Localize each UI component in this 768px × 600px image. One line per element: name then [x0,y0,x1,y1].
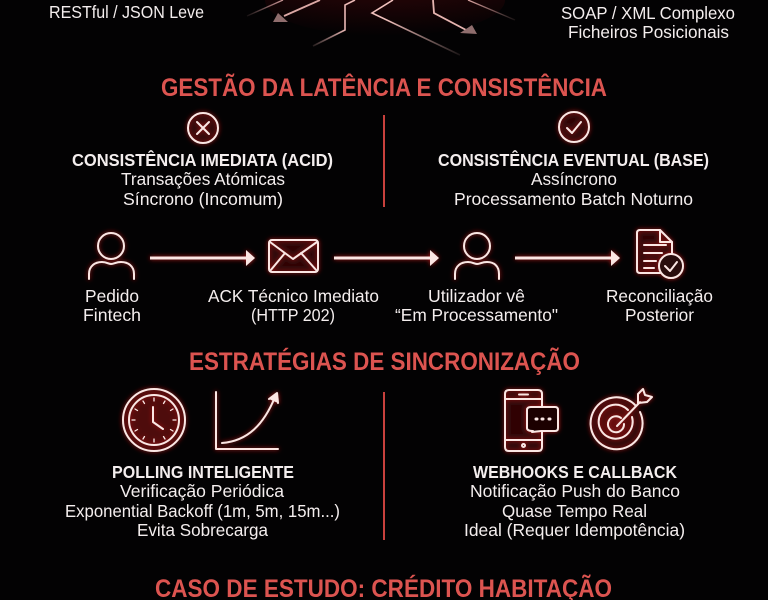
text: RESTful: RESTful / JSON Leve [49,2,204,22]
text block: BASE [438,149,709,209]
icon: target with arrow [591,389,652,449]
heading: sync strategies: ESTRATÉGIAS DE SINCRONIZAÇÃO [189,346,580,376]
text block: webhooks: Ideal (Requer Idempotência) [464,520,685,540]
text block: ACID [72,149,333,209]
icon: check in circle [559,112,589,142]
panel: polling [65,389,340,540]
flow: request to reconciliation [83,230,713,325]
label: later reconciliation [606,286,713,325]
label: later reconciliation: Posterior [625,305,694,325]
text block: webhooks [464,462,685,540]
icon: document with check [637,230,683,278]
label: user sees processing [395,286,558,325]
arrow: request to ACK [150,250,255,266]
panel: webhooks [464,389,685,540]
label: user sees processing: “Em Processamento" [395,305,558,325]
label: later reconciliation: Reconciliação [606,286,713,306]
label: Pedido Fintech [83,286,141,325]
text block: polling: POLLING INTELIGENTE [112,462,294,482]
label: user sees processing: Utilizador vê [428,286,525,306]
label: Pedido Fintech: Fintech [83,305,141,325]
text block: ACID: Síncrono (Incomum) [123,189,283,209]
divider: strategies [383,392,385,540]
label: ACK: (HTTP 202) [251,305,335,325]
icon: clock [123,389,185,451]
text: SOAP and positional files: Ficheiros Posicionais [568,22,729,42]
icon: cross in circle [188,113,218,143]
arrow: ACK to user [334,250,439,266]
icon: person request [89,233,134,279]
text block: webhooks: WEBHOOKS E CALLBACK [473,462,677,482]
label: ACK: ACK Técnico Imediato [208,286,379,306]
label: Pedido Fintech: Pedido [85,286,139,306]
heading: latency and consistency: GESTÃO DA LATÊNCIA E CONSISTÊNCIA [161,72,607,102]
panel: eventual consistency [438,112,709,209]
divider: consistency [383,115,385,207]
panel: immediate consistency [72,113,333,209]
text block: ACID: CONSISTÊNCIA IMEDIATA (ACID) [72,149,333,170]
text block: BASE: Assíncrono [531,169,617,189]
arrow: user to reconciliation [515,250,620,266]
label: ACK [208,286,379,325]
text block: ACID: Transações Atómicas [121,169,285,189]
text block: webhooks: Notificação Push do Banco [470,481,680,501]
text block: polling [65,462,340,540]
text: SOAP and positional files: SOAP / XML Complexo [561,3,735,23]
text: SOAP and positional files [561,3,735,42]
text block: BASE: CONSISTÊNCIA EVENTUAL (BASE) [438,149,709,170]
text block: polling: Verificação Periódica [120,481,284,501]
icon: envelope [269,240,318,272]
text block: polling: Exponential Backoff (1m, 5m, 15m...) [65,501,340,521]
text block: BASE: Processamento Batch Noturno [454,189,693,209]
icon: exponential chart [216,392,278,449]
diagram: circuit lines from top [247,0,515,55]
text block: webhooks: Quase Tempo Real [502,501,647,521]
icon: phone with chat bubble [505,390,558,451]
text block: polling: Evita Sobrecarga [137,520,268,540]
icon: person user [455,233,499,279]
